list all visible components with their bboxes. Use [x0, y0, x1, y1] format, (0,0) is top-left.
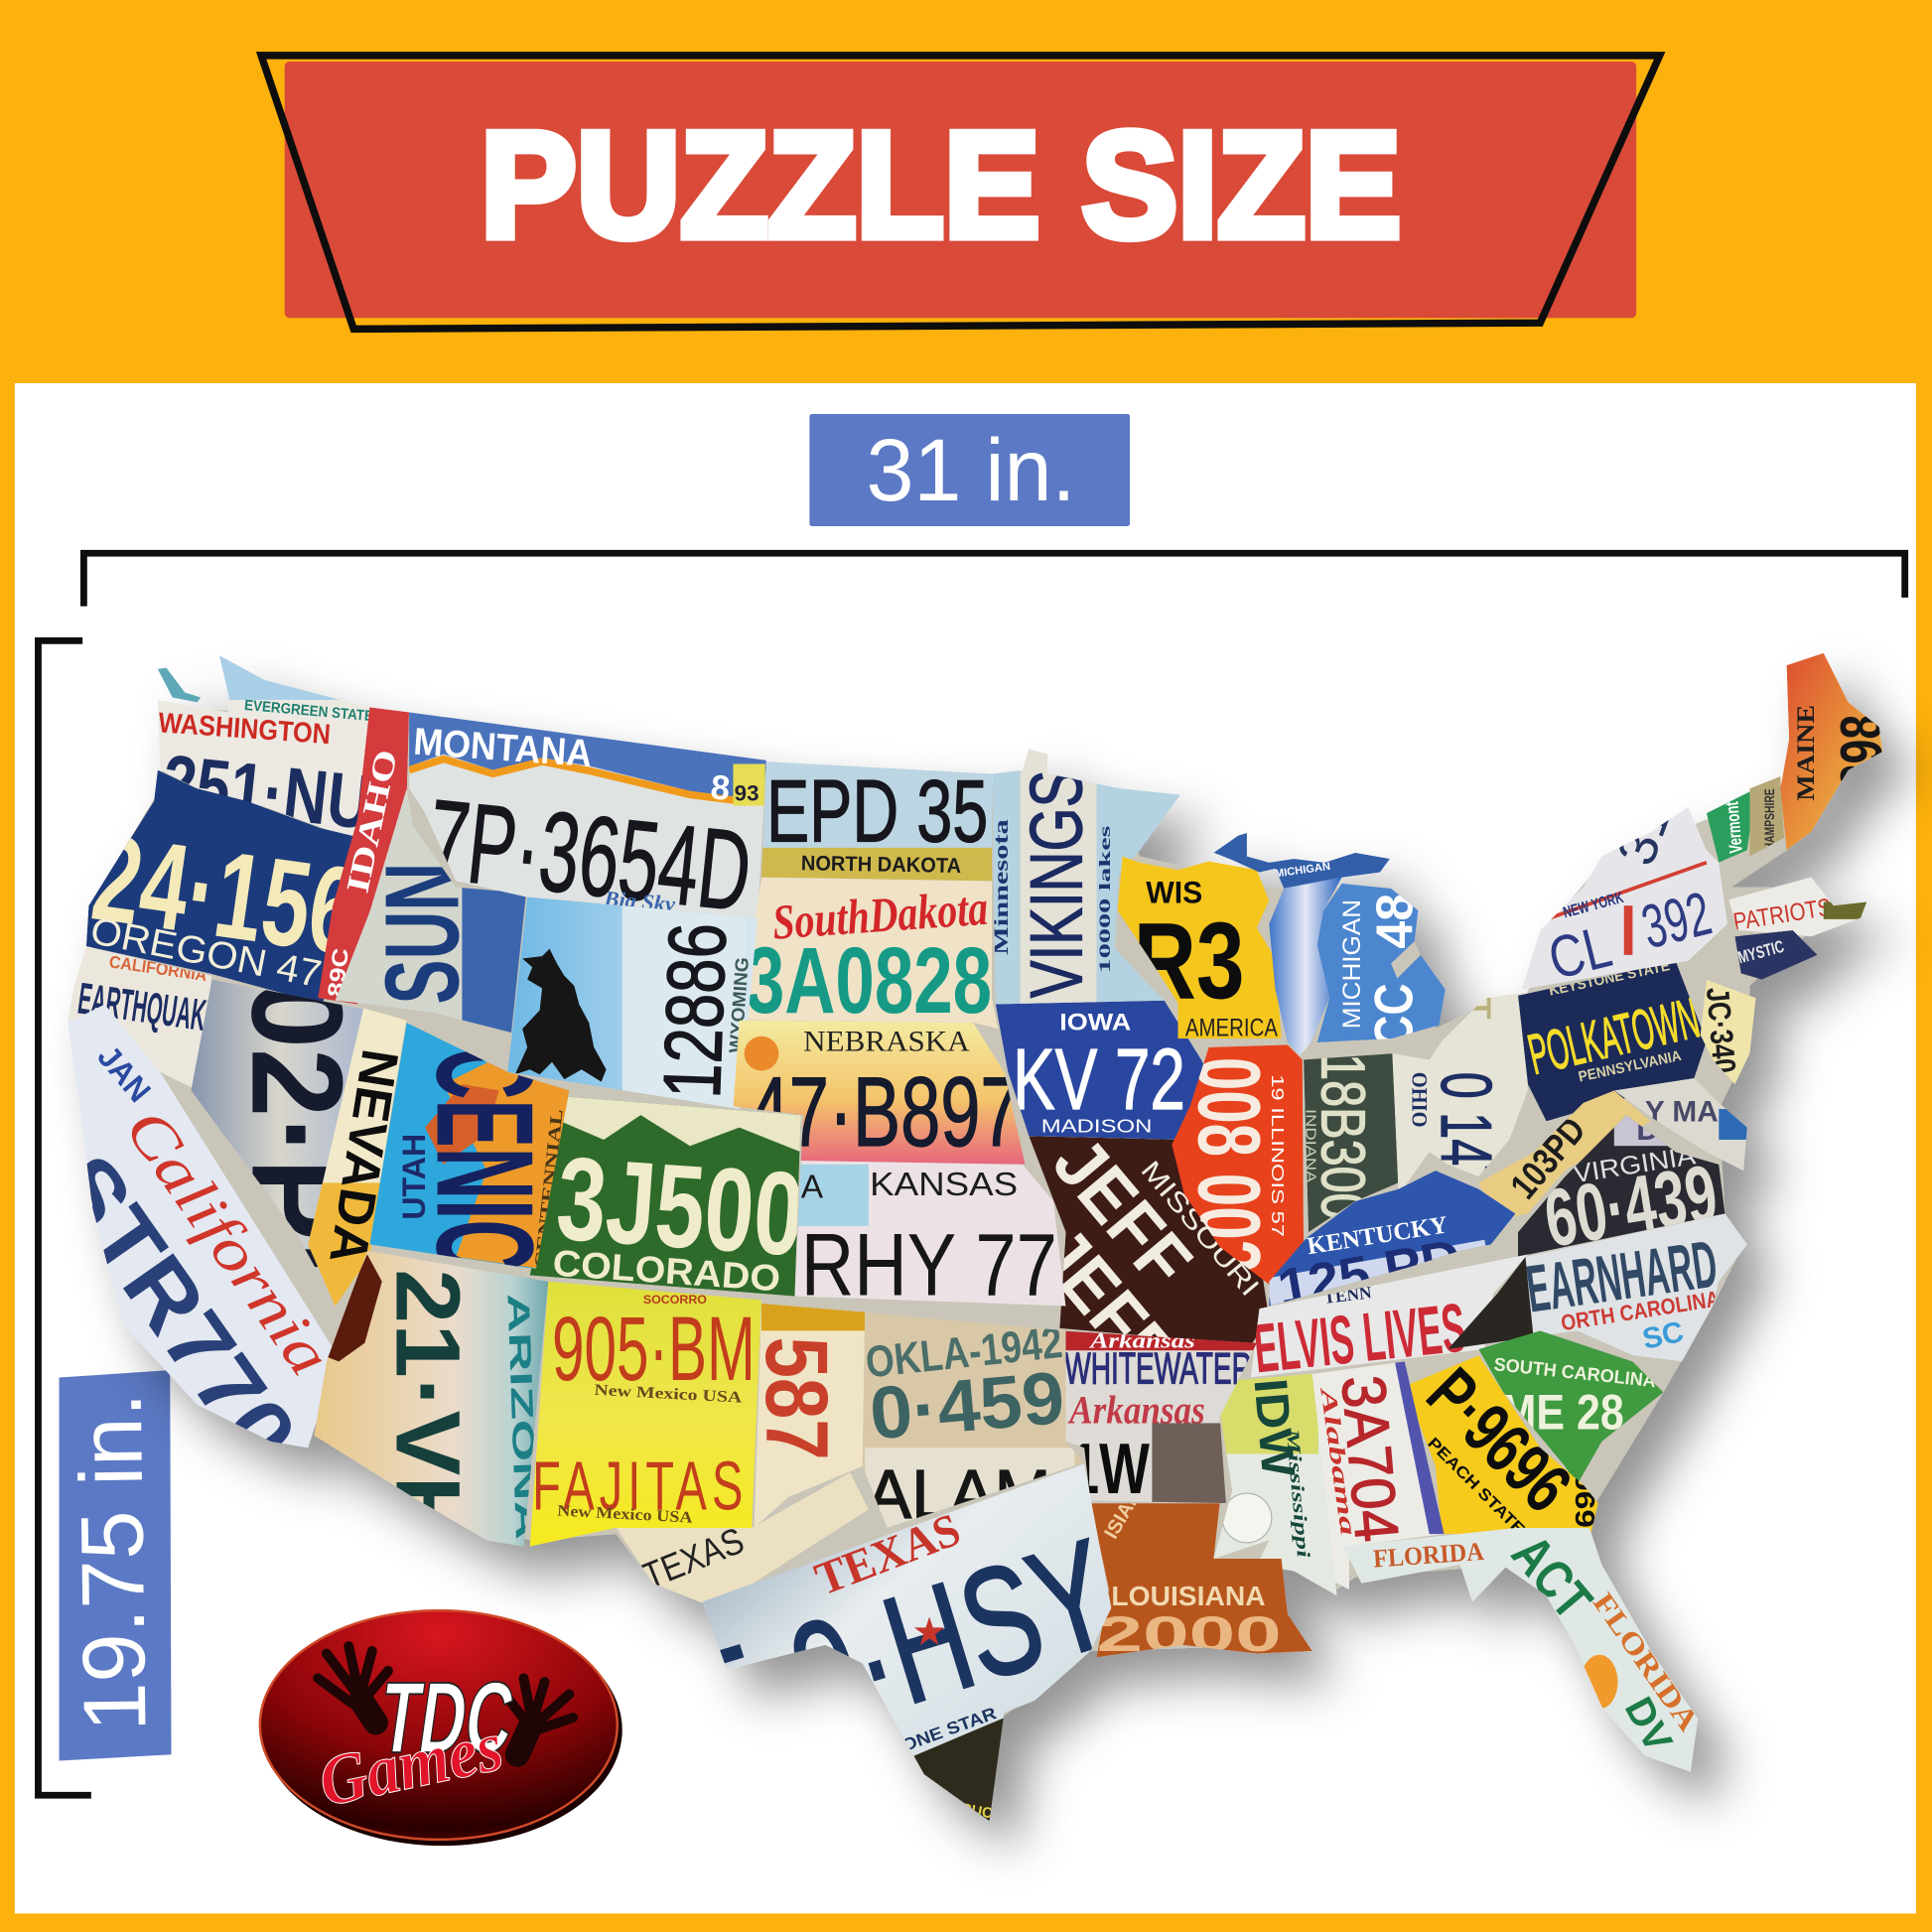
- state: Arkansas: [1059, 1328, 1263, 1509]
- state: Texas panhandle: [748, 1302, 866, 1528]
- state: Washington: EVERGREEN STATE: [243, 698, 374, 725]
- icon: magnolia: [1222, 1493, 1272, 1543]
- state: Massachusetts: PATRIOTS: [1731, 895, 1833, 936]
- state: Ohio: [1392, 968, 1528, 1195]
- state: Georgia: P·9696: [1412, 1353, 1586, 1527]
- state: Florida: FLORIDA: [1372, 1537, 1485, 1574]
- state: Oklahoma: OKLA-1942: [864, 1318, 1064, 1387]
- state: Alabama: Alabama: [1315, 1384, 1361, 1537]
- state: Washington: 251·NU: [159, 739, 375, 846]
- state: Montana: 7P·3654D: [423, 776, 757, 935]
- state: Missouri: MISSOURI: [1135, 1155, 1266, 1302]
- island: San Juan: [158, 668, 201, 702]
- state: Wisconsin: AMERICA: [1185, 1016, 1278, 1042]
- state: Pennsylvania: [1518, 958, 1707, 1121]
- logo shadow edge: [262, 1614, 622, 1846]
- icon: Texas star: ★: [911, 1610, 947, 1654]
- state: Nevada strip: [308, 1008, 409, 1307]
- width label: [809, 414, 1130, 526]
- state: North Dakota: [761, 761, 996, 883]
- state: Louisiana: LOUISIANA: [1111, 1581, 1266, 1611]
- state: Texas: 5-9·HSY: [680, 1506, 1131, 1793]
- state: California: STR770: [34, 1137, 317, 1481]
- state: New Mexico: New Mexico USA: [594, 1382, 743, 1407]
- state: Connecticut: [1734, 930, 1818, 980]
- state: Montana: 93: [735, 781, 759, 806]
- state: Oklahoma: 0·459: [867, 1356, 1067, 1455]
- state: Iowa: KV 72: [1013, 1032, 1185, 1128]
- state: Kentucky: 125 PD: [1274, 1229, 1465, 1317]
- state: Wisconsin: R3: [1134, 900, 1244, 1022]
- state: Montana: Big Sky: [603, 886, 676, 916]
- title: [481, 101, 1401, 269]
- banner red fill: [285, 62, 1636, 318]
- state: Georgia: PEACH STATE: [1424, 1435, 1528, 1539]
- state: Nevada plate: 02·PI: [224, 980, 369, 1276]
- state: Vermont: Vermont: [1721, 801, 1746, 854]
- state: Utah: [369, 1023, 569, 1272]
- state: North Dakota: EPD 35: [766, 761, 988, 861]
- state: Ohio: OHIO: [1407, 1072, 1432, 1128]
- width bracket: [83, 553, 1905, 607]
- state: Pennsylvania: PENNSYLVANIA: [1578, 1048, 1683, 1086]
- state: Nebraska: [733, 1021, 1026, 1168]
- logo disc: [260, 1610, 618, 1840]
- state: Wyoming: [507, 897, 758, 1109]
- state: Iowa: [996, 1001, 1213, 1140]
- state: Maine: 298: [1828, 715, 1894, 788]
- state: Virginia: DRA: [1636, 1111, 1706, 1147]
- state: Texas: TRUCK: [950, 1800, 1005, 1824]
- state: Utah: CENIC: [408, 1047, 562, 1272]
- state: Louisiana: [1090, 1474, 1312, 1662]
- state: Oklahoma: ALAM: [866, 1455, 1051, 1533]
- state: Florida: [1343, 1524, 1706, 1772]
- state: Missouri: JEFF CK: [1021, 1211, 1266, 1482]
- state: northern California plate: CALIFORNIA: [108, 951, 208, 985]
- state: Mississippi: [1213, 1374, 1337, 1595]
- state: Texas panhandle: 587: [748, 1337, 847, 1460]
- state: Missouri: JEFF: [1037, 1122, 1207, 1302]
- icon: bucking horse: [515, 949, 607, 1082]
- state: Oregon: [85, 770, 366, 1004]
- state: Arkansas: WHITEWATER: [1064, 1345, 1252, 1394]
- state: Utah: UTAH: [396, 1134, 432, 1220]
- state: New York: 317: [1605, 767, 1693, 873]
- state: Colorado: 3J500: [553, 1133, 808, 1282]
- white panel: [15, 383, 1916, 1913]
- state: Washington: [157, 655, 375, 850]
- state: Illinois: 008 002: [1180, 1057, 1280, 1273]
- state: Minnesota: [989, 750, 1180, 1008]
- state: Kansas: RHY 77: [801, 1214, 1057, 1313]
- state: Idaho: [318, 707, 409, 1004]
- state: Minnesota: 10000 lakes: [1097, 826, 1114, 973]
- state: New Hampshire: HAMPSHIRE: [1762, 788, 1777, 850]
- state: Vermont: [1707, 788, 1756, 863]
- state: Arizona: 21·VH: [377, 1269, 479, 1547]
- state: Maryland and Delaware: Y MA: [1645, 1095, 1719, 1128]
- state: New Jersey: JC·340: [1700, 986, 1742, 1074]
- state: California: California: [112, 1097, 344, 1388]
- state: New Mexico: New Mexico USA: [557, 1503, 693, 1527]
- state: Michigan upper peninsula: [1213, 833, 1390, 889]
- state: Texas: LONE STAR: [888, 1703, 1000, 1759]
- state: New York: 392: [1635, 880, 1718, 962]
- state: Oklahoma: [863, 1312, 1084, 1534]
- state: California: JAN: [90, 1038, 158, 1109]
- state: Georgia: 690: [1570, 1472, 1600, 1528]
- state: Michigan lower: [1317, 884, 1446, 1047]
- state: Michigan lower: 48: [1366, 894, 1424, 949]
- state: Indiana: [1303, 1053, 1399, 1232]
- state: South Dakota: 3A0828: [746, 928, 992, 1033]
- state: Iowa: IOWA: [1059, 1010, 1131, 1035]
- state: Idaho lower: SUN: [365, 863, 482, 1004]
- icon: orange: [1581, 1655, 1618, 1709]
- state: North Carolina: ORTH CAROLINA: [1560, 1286, 1722, 1335]
- state: northern California plate: [68, 946, 222, 1090]
- state: New York: CL: [1542, 912, 1618, 992]
- state: Oregon: 24·156: [85, 809, 366, 981]
- state: North Carolina: [1448, 1213, 1747, 1361]
- state: South Carolina: SOUTH CAROLINA: [1493, 1353, 1657, 1391]
- state: Wyoming: 12886: [647, 921, 744, 1100]
- state: Missouri: [1021, 1122, 1269, 1482]
- icon: left hand: [318, 1646, 388, 1723]
- state: Wisconsin: [1118, 857, 1282, 1042]
- state: Michigan upper peninsula: MICHIGAN: [1274, 861, 1331, 881]
- state: North Carolina: SC: [1639, 1315, 1687, 1356]
- state: Arizona: ARIZONA: [500, 1293, 544, 1540]
- state: South Dakota: [740, 878, 998, 1033]
- state: Arkansas: Arkansas: [1067, 1388, 1205, 1432]
- state: Texas: TEXAS: [808, 1504, 967, 1605]
- state: West Texas: TEXAS: [636, 1519, 750, 1596]
- state: Ohio: 0 14T: [1426, 1072, 1505, 1195]
- state: Kansas: KANSAS: [870, 1167, 1018, 1203]
- state: Utah: CENTENNIAL: [531, 1108, 567, 1270]
- state: Louisiana: ISIANA: [1100, 1474, 1153, 1543]
- state: Arkansas: Arkansas: [1088, 1328, 1195, 1353]
- TDC Games logo: [260, 1610, 622, 1846]
- state: Montana: [409, 712, 766, 935]
- state: Kentucky: KENTUCKY: [1306, 1211, 1449, 1260]
- state: Tennessee: [1250, 1254, 1528, 1387]
- state: Kansas: [794, 1161, 1066, 1313]
- state: New York: [1522, 767, 1727, 992]
- state: New Mexico: [530, 1282, 761, 1547]
- state: South Carolina: [1478, 1330, 1663, 1484]
- state: Florida: FLORIDA: [1587, 1587, 1706, 1737]
- title banner: [261, 56, 1660, 329]
- state: Illinois: [1172, 1044, 1304, 1287]
- state: West Texas: [617, 1472, 869, 1608]
- state: North Dakota: NORTH DAKOTA: [801, 852, 961, 878]
- state: Pennsylvania: POLKATOWN: [1523, 986, 1705, 1087]
- state: Wyoming: WYOMING: [725, 956, 753, 1053]
- width label: 31 in.: [866, 420, 1075, 519]
- state: Indiana: INDIANA: [1303, 1109, 1318, 1183]
- state: New York: NEW YORK: [1562, 889, 1625, 921]
- state: Arkansas: 1W: [1069, 1430, 1150, 1509]
- state: Maine: MAINE: [1793, 705, 1820, 801]
- height bracket: [38, 640, 91, 1795]
- Lake Michigan: [1269, 878, 1342, 1056]
- state: Idaho lower: [336, 788, 530, 1035]
- state: Mississippi: Mississippi: [1282, 1427, 1313, 1560]
- state: Alabama: 3A704: [1328, 1373, 1411, 1545]
- state: Virginia: [1518, 1109, 1725, 1265]
- state: Idaho: 89C: [323, 947, 353, 999]
- state: Nevada strip: NEVADA: [318, 1045, 409, 1268]
- state: Colorado: COLORADO: [551, 1242, 781, 1300]
- state: Washington: WASHINGTON: [157, 707, 332, 751]
- height label: 19.75 in.: [61, 1392, 164, 1732]
- state: Florida: ACT: [1500, 1524, 1603, 1630]
- state: West Virginia: [1478, 1090, 1651, 1220]
- state: West Virginia: 103PD: [1502, 1109, 1593, 1206]
- state: South Dakota: SouthDakota: [770, 881, 990, 950]
- license plate USA map: EARTHQUAKE: [75, 975, 222, 1042]
- state: Oregon: OREGON 47: [87, 909, 325, 996]
- state: Texas: [680, 1463, 1131, 1824]
- state: New Mexico: 905·BM: [552, 1299, 756, 1400]
- state: Ohio: 14: [1447, 968, 1502, 1023]
- state: Tennessee: TENN: [1322, 1283, 1373, 1308]
- state: North Carolina: EARNHARD: [1522, 1227, 1722, 1327]
- state: Virginia: VIRGINIA: [1571, 1140, 1698, 1188]
- state: Illinois: 19 ILLINOIS 57: [1268, 1074, 1288, 1237]
- state: Nebraska: NEBRASKA: [803, 1026, 970, 1058]
- license plate USA map: [34, 653, 1894, 1824]
- state: New Mexico: FAJITAS: [532, 1447, 748, 1524]
- state: Maryland and Delaware: [1614, 1078, 1749, 1171]
- state: New Mexico: SOCORRO: [643, 1293, 707, 1307]
- state: Michigan lower: MICHIGAN: [1339, 899, 1366, 1029]
- state: Nebraska: 47·B897: [750, 1057, 1021, 1168]
- banner black outline: [261, 56, 1660, 329]
- state: Kentucky: [1266, 1171, 1516, 1326]
- state: New Hampshire: [1749, 776, 1784, 857]
- state: Montana: 8: [709, 768, 732, 808]
- state: Michigan lower: CC: [1363, 983, 1424, 1047]
- state: Tennessee: ELVIS LIVES: [1250, 1289, 1469, 1387]
- state: Mississippi: IDW: [1244, 1376, 1306, 1479]
- state: Louisiana: 2000: [1097, 1606, 1282, 1662]
- state: Iowa: MADISON: [1041, 1116, 1152, 1137]
- state: South Carolina: ME 28: [1501, 1385, 1624, 1441]
- state: Indiana: 18B300: [1309, 1053, 1377, 1220]
- logo wordmark Games: Games: [312, 1706, 509, 1822]
- state: Montana: MONTANA: [412, 721, 594, 775]
- state: Kansas: A: [801, 1169, 824, 1205]
- state: Minnesota: Minnesota: [989, 819, 1013, 955]
- map backing: [92, 709, 1811, 1762]
- state: Idaho: IDAHO: [339, 747, 404, 896]
- state: California: [34, 1004, 344, 1481]
- state: Connecticut: MYSTIC: [1735, 936, 1786, 967]
- state: Minnesota: VIKINGS: [1016, 770, 1098, 998]
- state: West Virginia: West Virginia: [1481, 1103, 1548, 1173]
- title: PUZZLE: [481, 101, 1039, 269]
- state: Colorado: [530, 1097, 808, 1300]
- logo wordmark TDC: TDC: [374, 1660, 520, 1774]
- state: Virginia: 60·439: [1539, 1149, 1724, 1265]
- state: Arizona: [314, 1251, 548, 1547]
- state: Maine: [1780, 653, 1894, 850]
- state: Massachusetts: [1728, 878, 1872, 936]
- state: Wisconsin: WIS: [1146, 876, 1202, 910]
- icon: right hand: [507, 1678, 573, 1754]
- state: Pennsylvania: KEYSTONE STATE: [1548, 958, 1672, 1000]
- state: Alabama: [1312, 1361, 1448, 1589]
- state: Florida: DV: [1616, 1690, 1681, 1759]
- title: SIZE: [1082, 101, 1401, 269]
